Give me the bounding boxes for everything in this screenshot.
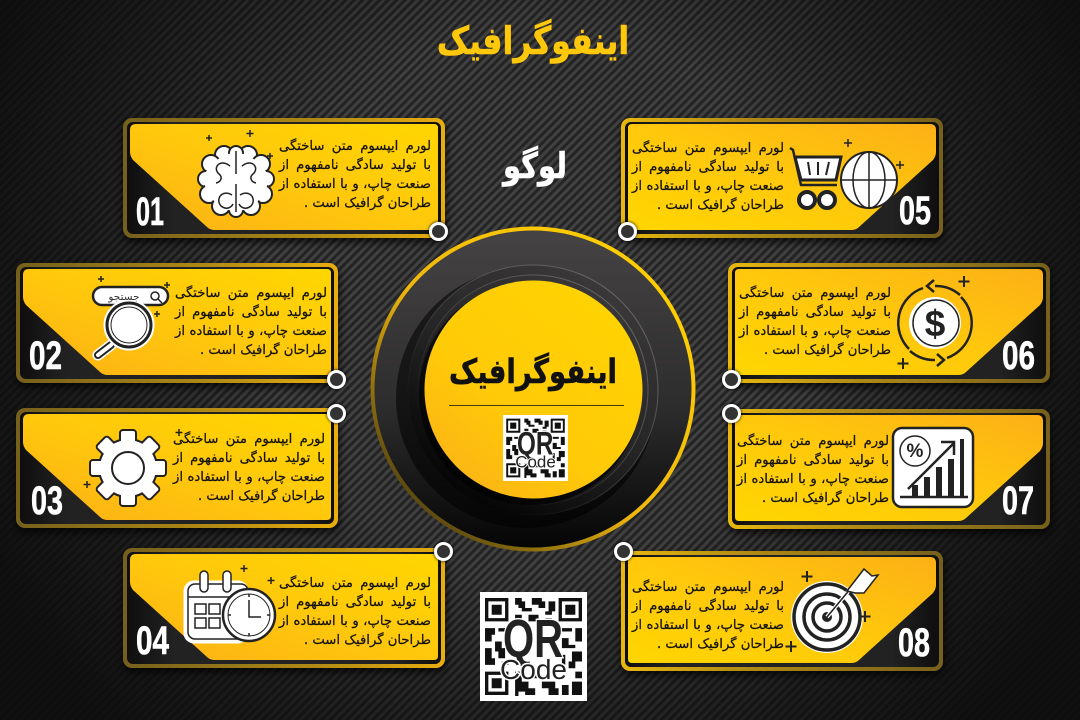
panel: card 02 <box>16 263 342 390</box>
text block: با تولید سادگی نامفهوم از <box>173 450 325 466</box>
text block: صنعت چاپ، و با استفاده از <box>737 472 889 486</box>
panel: card 03: 03 <box>31 479 63 523</box>
panel: card 03 <box>16 408 342 536</box>
text block: لورم ایپسوم متن ساختگی <box>632 140 784 156</box>
text block <box>631 140 784 212</box>
text block <box>278 138 431 210</box>
text block: لورم ایپسوم متن ساختگی <box>175 286 327 300</box>
text block: با تولید سادگی نامفهوم از <box>739 304 891 320</box>
text block: طراحان گرافیک است . <box>304 632 431 648</box>
icon: gear <box>84 429 182 505</box>
connector dot 05 <box>618 222 636 240</box>
text block: طراحان گرافیک است . <box>764 342 891 358</box>
text block: لورم ایپسوم متن ساختگی <box>632 580 784 594</box>
connector dot 06 <box>722 370 740 388</box>
text block: با تولید سادگی نامفهوم از <box>279 158 431 172</box>
panel: card 05: 05 <box>899 189 931 233</box>
text block: طراحان گرافیک است . <box>657 636 784 652</box>
panel: card 06 <box>726 263 1052 390</box>
text block: با تولید سادگی نامفهوم از <box>632 598 784 614</box>
text block: لورم ایپسوم متن ساختگی <box>737 434 889 448</box>
logo text: لوگو <box>503 145 567 187</box>
text block: با تولید سادگی نامفهوم از <box>737 452 889 468</box>
text block <box>278 575 431 648</box>
text block <box>738 285 891 358</box>
text block <box>174 285 327 358</box>
text block: لورم ایپسوم متن ساختگی <box>279 138 431 154</box>
connector dot 07 <box>722 404 740 422</box>
bottom QR code: QR <box>503 609 563 669</box>
center title: اینفوگرافیک <box>449 352 617 392</box>
text block: صنعت چاپ، و با استفاده از <box>279 176 431 192</box>
text block: لورم ایپسوم متن ساختگی <box>279 576 431 590</box>
center QR code: Code <box>515 453 556 472</box>
icon: calendar and clock <box>185 565 275 642</box>
icon: search <box>93 276 170 355</box>
text block: صنعت چاپ، و با استفاده از <box>175 324 327 338</box>
bottom QR code <box>480 592 587 701</box>
panel: card 08 <box>618 551 945 678</box>
text block: صنعت چاپ، و با استفاده از <box>173 470 325 484</box>
text block: صنعت چاپ، و با استفاده از <box>632 618 784 632</box>
icon: growth chart with percent: % <box>907 441 924 462</box>
panel: card 08: 08 <box>898 621 930 665</box>
text block: طراحان گرافیک است . <box>762 490 889 506</box>
text block: با تولید سادگی نامفهوم از <box>632 160 784 174</box>
connector dot 08 <box>614 542 632 560</box>
center circle <box>370 226 696 552</box>
text block <box>631 579 784 652</box>
icon: dollar with arrows: $ <box>925 303 946 344</box>
text block: لورم ایپسوم متن ساختگی <box>739 286 891 300</box>
connector dot 04 <box>434 542 452 560</box>
connector dot 01 <box>428 222 448 240</box>
panel: card 06: 06 <box>1002 334 1035 378</box>
text block: با تولید سادگی نامفهوم از <box>279 594 431 610</box>
icon: target with arrow <box>786 569 878 653</box>
panel: card 01: 01 <box>136 190 164 234</box>
title: اینفوگرافیک <box>437 20 629 64</box>
text block: صنعت چاپ، و با استفاده از <box>279 614 431 628</box>
text block: با تولید سادگی نامفهوم از <box>175 304 327 320</box>
bottom QR code: Code <box>500 654 567 685</box>
panel: card 04: 04 <box>136 619 170 663</box>
text block: طراحان گرافیک است . <box>304 196 431 210</box>
text block: صنعت چاپ، و با استفاده از <box>632 178 784 194</box>
panel: card 07 <box>726 409 1052 536</box>
text block: لورم ایپسوم متن ساختگی <box>173 432 325 446</box>
icon: brain <box>198 130 274 217</box>
text block <box>172 431 325 504</box>
connector dot 02 <box>326 370 346 388</box>
text block <box>736 433 889 506</box>
panel: card 02: 02 <box>29 334 62 378</box>
icon: dollar with arrows <box>898 276 972 369</box>
panel: card 04 <box>123 548 450 674</box>
text block: طراحان گرافیک است . <box>657 198 784 212</box>
text block: طراحان گرافیک است . <box>198 488 325 504</box>
panel: card 05 <box>618 118 946 246</box>
panel: card 01 <box>122 118 450 246</box>
text block: طراحان گرافیک است . <box>200 342 327 358</box>
text block: صنعت چاپ، و با استفاده از <box>739 324 891 338</box>
connector dot 03 <box>326 404 346 422</box>
icon: growth chart with percent <box>893 428 973 507</box>
center QR code <box>503 415 568 481</box>
icon: search: جستجو <box>107 291 140 303</box>
center QR code: QR <box>517 424 553 461</box>
icon: shopping cart and globe <box>790 139 904 208</box>
panel: card 07: 07 <box>1002 479 1034 523</box>
